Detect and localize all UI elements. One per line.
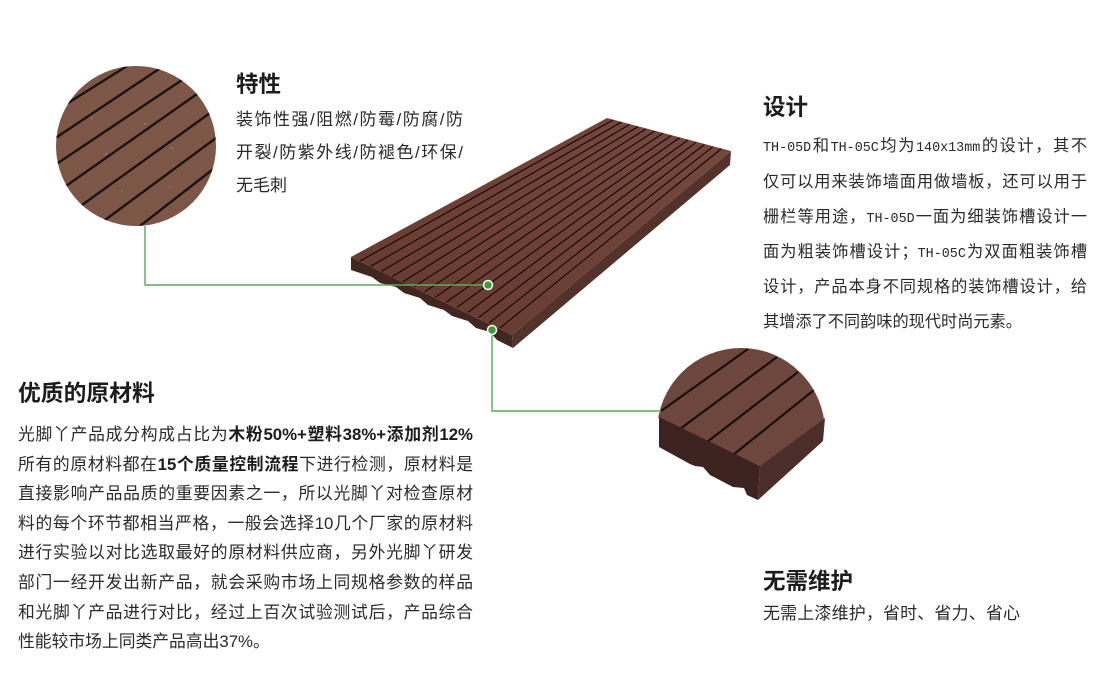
text block: 原材料: 进行实验以对比选取最好的原材料供应商，另外光脚丫研发 <box>18 543 473 562</box>
text block: 特性: 装饰性强/阻燃/防霉/防腐/防 <box>236 110 463 129</box>
circle detail: board cross-section <box>658 348 825 500</box>
wood-plastic decking board <box>351 118 731 348</box>
heading: 特性: 特性 <box>236 72 281 97</box>
heading: 无需维护: 无需维护 <box>763 569 853 594</box>
text block: 设计: 面为粗装饰槽设计；TH-05C为双面粗装饰槽 <box>763 243 1087 262</box>
profile top surface <box>658 348 824 466</box>
text block: 原材料: 所有的原材料都在15个质量控制流程下进行检测，原材料是 <box>18 455 473 474</box>
text block: 原材料: 性能较市场上同类产品高出37%。 <box>18 632 270 651</box>
profile right face <box>758 418 825 500</box>
product illustration with callouts <box>56 66 825 500</box>
text block: 特性: 无毛刺 <box>236 176 287 195</box>
profile front face <box>659 417 760 500</box>
text block: 特性: 开裂/防紫外线/防褪色/环保/ <box>236 143 463 162</box>
board front profile <box>351 257 513 348</box>
board top face <box>351 118 731 335</box>
text block: 设计 <box>763 136 1087 331</box>
text block: 原材料: 料的每个环节都相当严格，一般会选择10几个厂家的原材料 <box>18 514 473 533</box>
connector line: cross-section detail <box>492 330 661 411</box>
connector line: surface detail <box>145 226 488 285</box>
text block: 原材料: 和光脚丫产品进行对比，经过上百次试验测试后，产品综合 <box>18 603 473 622</box>
text block: 设计: 仅可以用来装饰墙面用做墙板，还可以用于 <box>763 173 1087 191</box>
text block: 设计: 设计，产品本身不同规格的装饰槽设计，给 <box>763 278 1087 296</box>
text block: 无需维护: 无需上漆维护，省时、省力、省心 <box>763 604 1020 623</box>
text block: 原材料 <box>18 425 473 651</box>
board grooves <box>360 120 721 328</box>
text block: 原材料: 直接影响产品品质的重要因素之一，所以光脚丫对检查原材 <box>18 484 473 503</box>
marker dot: cross-section <box>488 326 496 334</box>
heading: 设计: 设计 <box>763 95 808 120</box>
text block: 原材料: 部门一经开发出新产品，就会采购市场上同规格参数的样品 <box>18 573 473 592</box>
board side face <box>512 151 731 348</box>
text block: 设计: TH-05D和TH-05C均为140x13mm的设计，其不 <box>763 137 1087 156</box>
text block: 特性 <box>236 110 463 195</box>
text block: 原材料: 光脚丫产品成分构成占比为木粉50%+塑料38%+添加剂12% <box>18 425 473 444</box>
text block: 设计: 其增添了不同韵味的现代时尚元素。 <box>763 313 1022 331</box>
marker dot: surface <box>484 280 492 290</box>
circle detail: board surface grooves <box>56 66 216 226</box>
heading: 优质的原材料: 优质的原材料 <box>18 380 155 406</box>
text block: 设计: 栅栏等用途，TH-05D一面为细装饰槽设计一 <box>763 208 1087 227</box>
